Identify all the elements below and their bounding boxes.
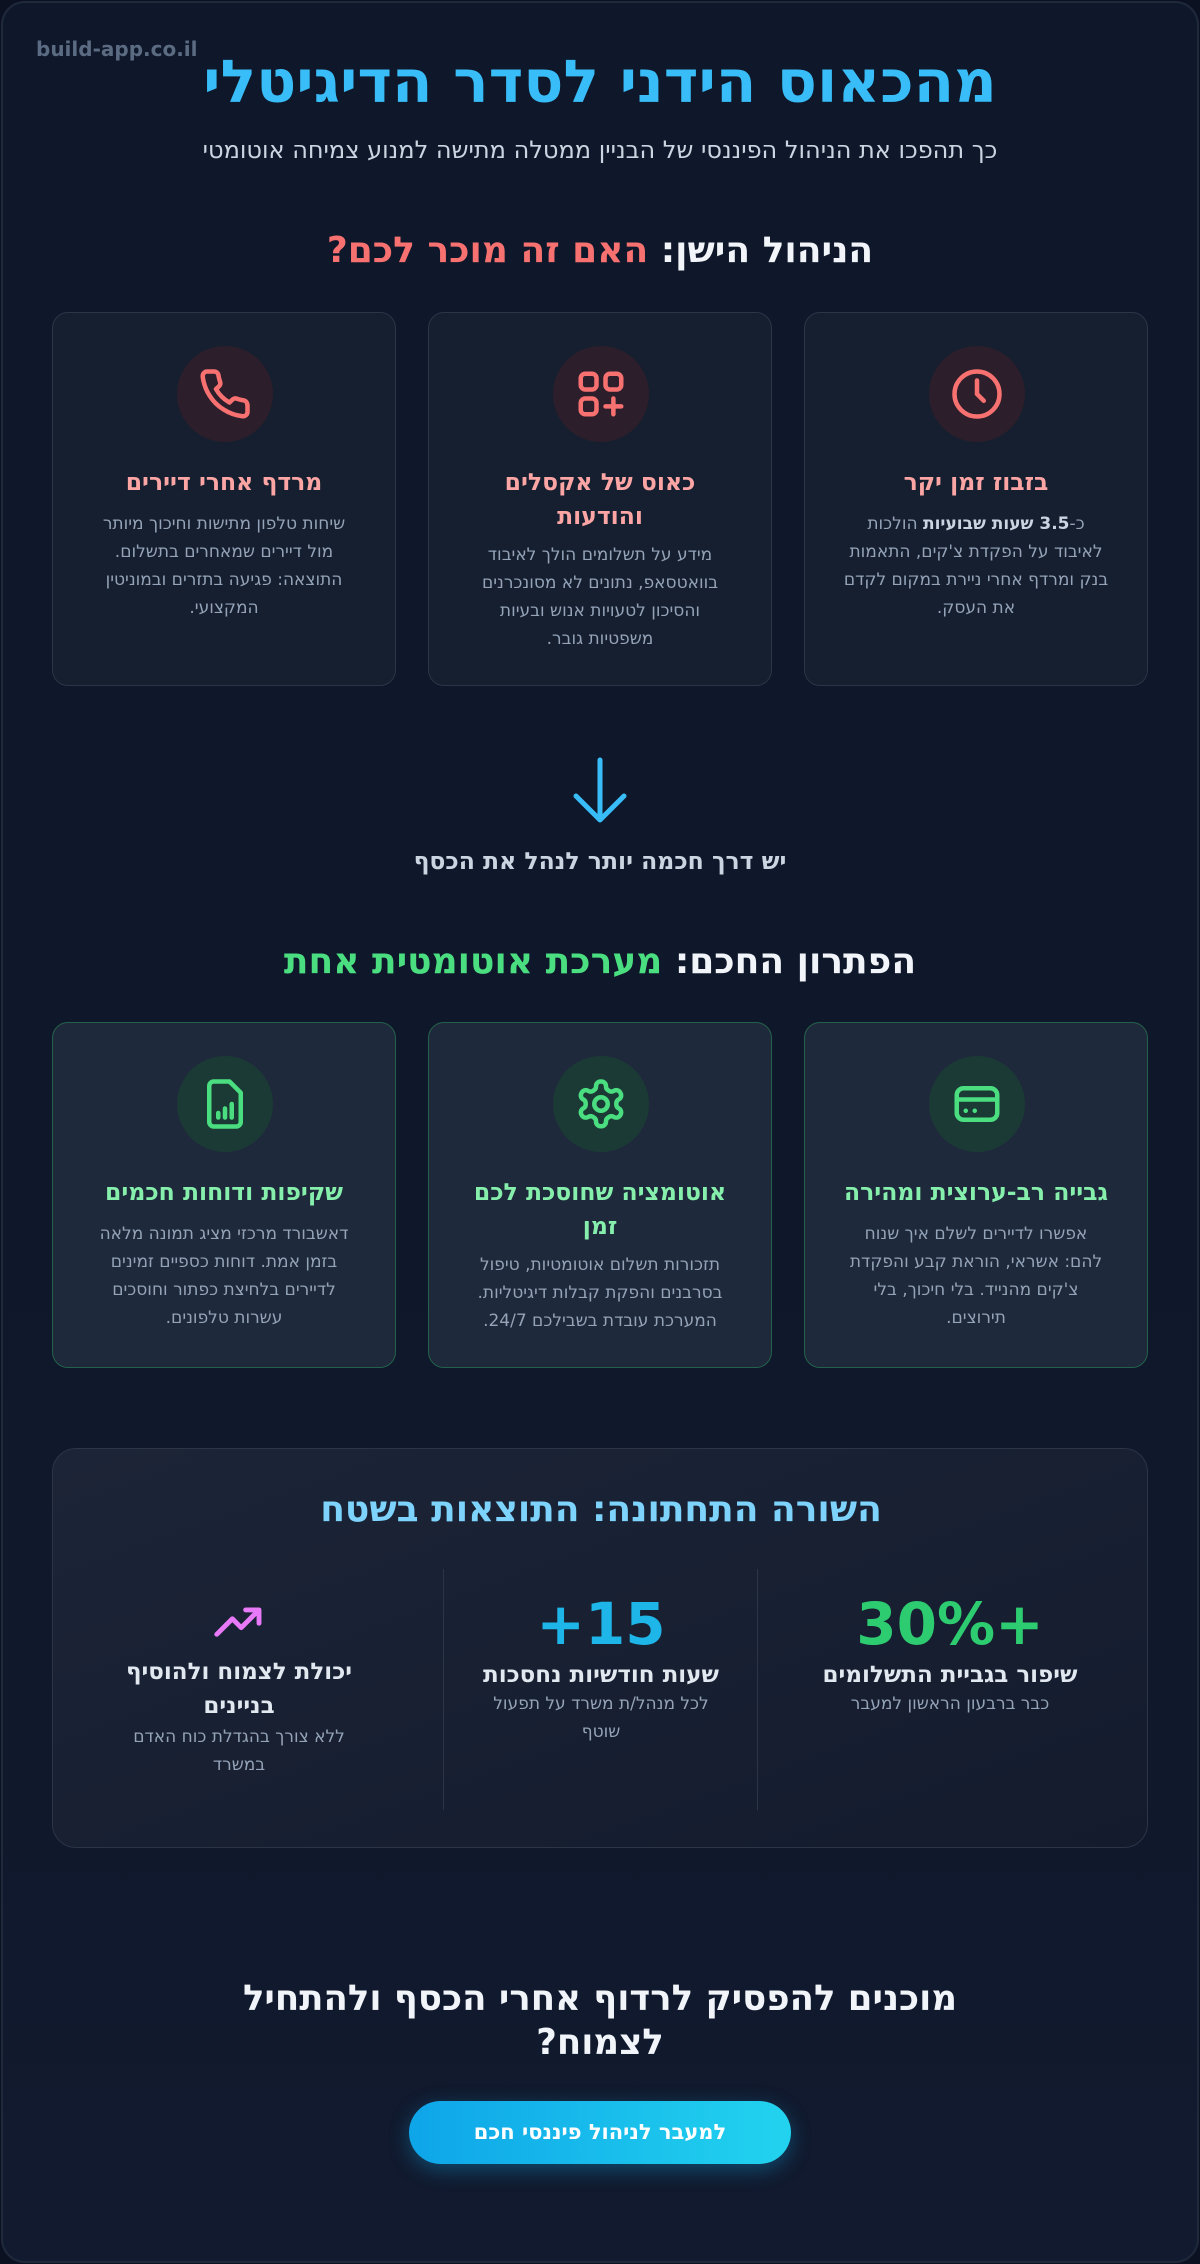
card body: דאשבורד מרכזי מציג תמונה מלאה בזמן אמת. דוחות כספיים זמינים לדיירים בלחיצת כפתור וחוסכים עשרות טלפונים. [100, 1224, 348, 1328]
divider [443, 1569, 444, 1810]
icon: gear [553, 1056, 649, 1152]
stat: growth [126, 1608, 352, 1775]
CTA button: למעבר לניהול פיננסי חכם [474, 2120, 726, 2144]
panel: solution cards [52, 1022, 1148, 1368]
panel: problem cards [52, 312, 1148, 686]
card title: בזבוז זמן יקר [904, 468, 1048, 496]
results heading: השורה התחתונה: התוצאות בשטח [320, 1489, 882, 1530]
big number: 30%+ [856, 1590, 1044, 1658]
stat: hours saved [483, 1590, 719, 1742]
card: transparency and reports [52, 1022, 396, 1368]
panel: results [52, 1448, 1148, 1848]
icon: clock [929, 346, 1025, 442]
card: time waste [804, 312, 1148, 686]
card: automation [428, 1022, 772, 1368]
card: multi-channel collection [804, 1022, 1148, 1368]
transition text: יש דרך חכמה יותר לנהל את הכסף [414, 847, 786, 875]
CTA button [409, 2101, 791, 2164]
stat label: יכולת לצמוח ולהוסיף בניינים [126, 1659, 352, 1719]
CTA heading: מוכנים להפסיק לרדוף אחרי הכסף ולהתחיל לצמוח? [243, 1978, 957, 2063]
subtitle: כך תהפכו את הניהול הפיננסי של הבניין ממטלה מתישה למנוע צמיחה אוטומטי [203, 136, 997, 164]
big number: +15 [536, 1590, 666, 1658]
icon: report file [177, 1056, 273, 1152]
card title: שקיפות ודוחות חכמים [105, 1178, 343, 1206]
icon: credit card [929, 1056, 1025, 1152]
card body: תזכורות תשלום אוטומטיות, טיפול בסרבנים והפקת קבלות דיגיטליות. המערכת עובדת בשבילכם 24/7. [478, 1255, 722, 1331]
icon: trending up [214, 1608, 262, 1637]
card body: כ-3.5 שעות שבועיות הולכות לאיבוד על הפקדת צ'קים, התאמות בנק ומרדף אחרי ניירת במקום לקדם את העסק. [844, 514, 1108, 618]
heading: old management: הניהול הישן: האם זה מוכר לכם? [327, 230, 873, 271]
title: מהכאוס הידני לסדר הדיגיטלי [203, 47, 997, 116]
card title: גבייה רב-ערוצית ומהירה [844, 1178, 1108, 1206]
card body: מידע על תשלומים הולך לאיבוד בוואטסאפ, נתונים לא מסונכרנים והסיכון לטעויות אנוש ובעיות משפטיות גובר. [482, 545, 718, 649]
card title: אוטומציה שחוסכת לכם זמן [474, 1178, 726, 1240]
card body: שיחות טלפון מתישות וחיכוך מיותר מול דיירים שמאחרים בתשלום. התוצאה: פגיעה בתזרים ובמוניטין המקצועי. [103, 514, 345, 618]
stat sub: ללא צורך בהגדלת כוח האדם במשרד [133, 1727, 345, 1775]
stat label: שעות חודשיות נחסכות [483, 1662, 719, 1688]
card: excel chaos [428, 312, 772, 686]
arrow: down [574, 758, 626, 822]
card body: אפשרו לדיירים לשלם איך שנוח להם: אשראי, הוראת קבע והפקדת צ'קים מהנייד. בלי חיכוך, בלי תירוצים. [850, 1224, 1102, 1328]
stat label: שיפור בגביית התשלומים [823, 1662, 1077, 1688]
heading: smart solution: הפתרון החכם: מערכת אוטומטית אחת [284, 941, 916, 982]
card title: כאוס של אקסלים והודעות [505, 468, 695, 530]
icon: phone [177, 346, 273, 442]
card: chasing tenants [52, 312, 396, 686]
stat sub: לכל מנהל/ת משרד על תפעול שוטף [493, 1694, 709, 1742]
stat sub: כבר ברבעון הראשון למעבר [851, 1694, 1049, 1714]
divider [757, 1569, 758, 1810]
icon: apps [553, 346, 649, 442]
site label: build-app.co.il [36, 37, 198, 61]
stat: collection improvement [823, 1590, 1078, 1714]
card title: מרדף אחרי דיירים [126, 468, 322, 496]
